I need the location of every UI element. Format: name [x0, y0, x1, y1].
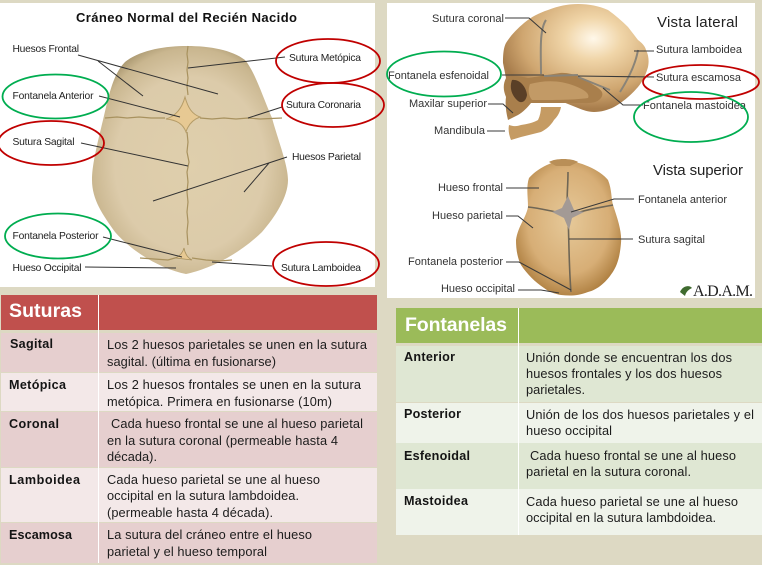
highlight ovals — [0, 39, 384, 286]
labels: skull parts: Sutura Lamboidea — [281, 263, 361, 274]
panel: anatomical views — [387, 3, 759, 300]
row: Mastoidea — [404, 494, 738, 525]
table heading: Fontanelas — [405, 314, 507, 336]
title: Cráneo Normal del Recién Nacido — [76, 10, 297, 25]
row: Sagital: Sagital — [10, 337, 53, 351]
row: Coronal: en la sutura coronal (permeable hasta 4 — [107, 433, 338, 448]
fontanel: anterior — [166, 97, 200, 132]
row: Posterior — [404, 407, 754, 438]
row: Coronal: Coronal — [9, 417, 59, 431]
row: Sagital: sagital. (última en fusionarse) — [107, 354, 276, 369]
row: Anterior: Anterior — [404, 350, 455, 364]
row: Coronal: década). — [107, 449, 157, 464]
labels: views: Sutura escamosa — [656, 72, 742, 84]
row: Mastoidea: Cada hueso parietal se une al hueso — [526, 494, 738, 509]
row: Escamosa: Escamosa — [9, 528, 73, 542]
row: Escamosa: parietal y el hueso temporal — [107, 544, 267, 559]
panel: newborn skull diagram — [0, 3, 384, 287]
highlight ovals — [387, 52, 759, 142]
row: Esfenoidal: parietal en la sutura coronal. — [526, 464, 691, 479]
labels: views: Hueso frontal — [438, 182, 503, 194]
labels: skull parts: Sutura Coronaria — [286, 100, 361, 111]
row: Sagital: Los 2 huesos parietales se unen en la sutura — [107, 337, 368, 352]
labels: skull parts: Sutura Sagital — [12, 137, 74, 148]
labels: skull parts: Fontanela Posterior — [12, 231, 99, 242]
illustration: skull from above — [92, 46, 288, 274]
heading: lateral view: Vista lateral — [657, 14, 738, 31]
labels: views: Fontanela mastoidea — [643, 100, 747, 112]
eye orbit — [511, 80, 527, 102]
fontanel: posterior — [176, 248, 192, 260]
labels: views: Fontanela anterior — [638, 194, 727, 206]
table: Fontanelas — [396, 308, 762, 535]
row: Metópica — [9, 377, 362, 409]
labels: views: Hueso parietal — [432, 210, 503, 222]
table: Suturas — [1, 295, 377, 563]
illustration: superior skull — [516, 159, 621, 296]
labels: skull parts: Huesos Parietal — [292, 152, 361, 163]
labels: skull parts: Sutura Metópica — [289, 53, 361, 64]
mandible — [509, 107, 561, 140]
row: Posterior: hueso occipital — [526, 423, 612, 438]
row: Lamboidea — [9, 472, 320, 520]
labels: skull parts: Hueso Occipital — [12, 263, 82, 274]
row: Lamboidea: occipital en la sutura lambdoidea. — [107, 488, 299, 503]
row: Metópica: metópica. Primera en fusionarse (10m) — [107, 394, 332, 409]
row: Esfenoidal: Esfenoidal — [404, 449, 470, 463]
row: Anterior: huesos frontales y los dos huesos — [526, 366, 722, 381]
temporal and face bones — [504, 73, 602, 120]
labels: views: Sutura lamboidea — [656, 44, 743, 56]
row: Lamboidea: Cada hueso parietal se une al hueso — [107, 472, 320, 487]
labels: skull parts — [12, 44, 361, 274]
labels: views: Maxilar superior — [409, 98, 487, 110]
row: Mastoidea: occipital en la sutura lambdoidea. — [526, 510, 716, 525]
row: Sagital — [10, 337, 368, 369]
row: Mastoidea: Mastoidea — [404, 494, 469, 508]
labels: views — [388, 13, 747, 295]
heading: superior view: Vista superior — [653, 162, 743, 179]
table heading: Suturas — [9, 300, 82, 322]
row: Metópica: Metópica — [9, 378, 67, 392]
row: Posterior: Posterior — [404, 407, 461, 421]
labels: skull parts: Fontanela Anterior — [12, 91, 94, 102]
row: Anterior — [404, 350, 732, 397]
labels: views: Sutura sagital — [638, 234, 705, 246]
row: Anterior: parietales. — [526, 382, 585, 397]
row: Coronal — [9, 416, 363, 464]
row: Coronal: Cada hueso frontal se une al hueso parietal — [111, 416, 363, 431]
labels: views: Fontanela esfenoidal — [388, 70, 489, 82]
labels: skull parts: Huesos Frontal — [12, 44, 79, 55]
labels: views: Sutura coronal — [432, 13, 504, 25]
row: Escamosa — [9, 527, 312, 559]
row: Esfenoidal — [404, 448, 736, 479]
row: Lamboidea: (permeable hasta 4 década). — [107, 505, 273, 520]
illustration: lateral skull — [503, 4, 649, 140]
row: Metópica: Los 2 huesos frontales se unen en la sutura — [107, 377, 362, 392]
labels: views: Mandibula — [434, 125, 486, 137]
labels: views: Hueso occipital — [441, 283, 515, 295]
logo: ADAM: A.D.A.M. — [693, 283, 753, 300]
leader lines — [487, 18, 654, 293]
leader lines — [78, 55, 287, 268]
labels: views: Fontanela posterior — [408, 256, 503, 268]
row: Posterior: Unión de los dos huesos parietales y el — [526, 407, 754, 422]
row: Lamboidea: Lamboidea — [9, 473, 81, 487]
row: Anterior: Unión donde se encuentran los dos — [526, 350, 732, 365]
row: Escamosa: La sutura del cráneo entre el hueso — [107, 527, 312, 542]
row: Esfenoidal: Cada hueso frontal se une al hueso — [530, 448, 736, 463]
